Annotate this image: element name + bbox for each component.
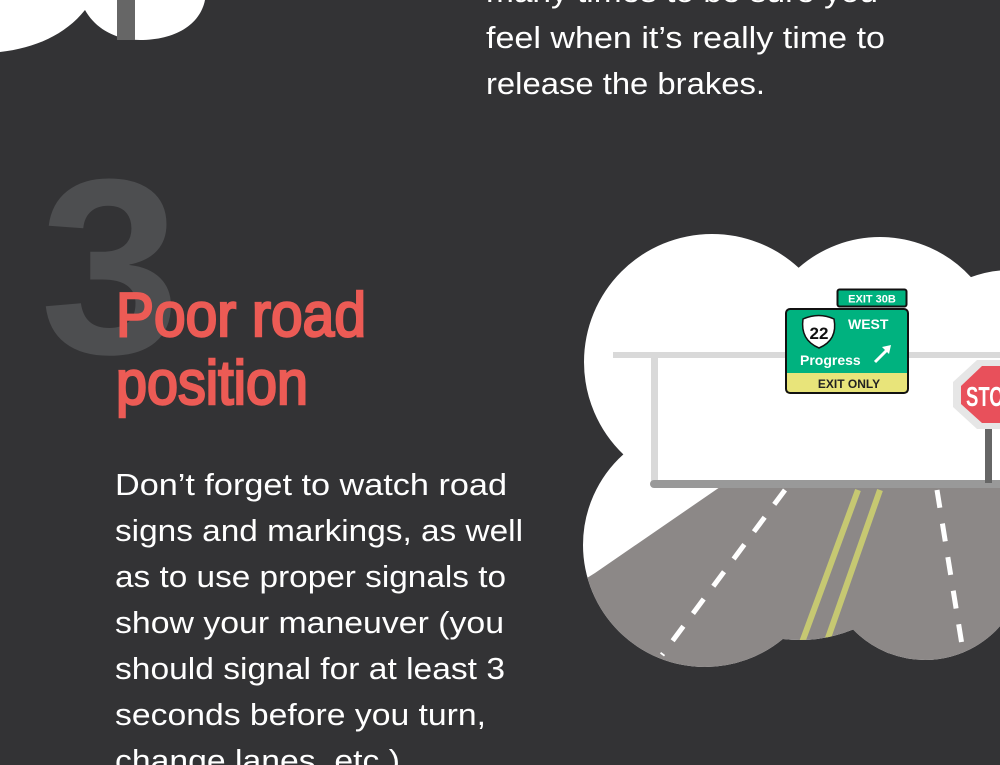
highway sign: Progress [800,352,861,368]
heading: Poor road [116,281,366,350]
text block: top right [486,0,885,101]
heading: position [116,349,308,418]
body text: Don’t forget to watch road [115,467,507,502]
highway sign: 22 [810,324,828,343]
body text: as to use proper signals to [115,559,506,594]
body text: show your maneuver (you [115,605,504,640]
body text: seconds before you turn, [115,697,486,732]
heading [116,281,366,418]
highway sign: WEST [848,316,889,332]
big number 3: 3 [40,127,180,406]
illustration: road scene cloud [583,234,1000,667]
body text: should signal for at least 3 [115,651,505,686]
gantry [613,352,1000,358]
road [588,488,1000,667]
highway sign [786,290,908,393]
cloud: top-left fragment [0,0,205,52]
body text [115,467,523,765]
body text: signs and markings, as well [115,513,523,548]
text block: top right: release the brakes. [486,66,765,101]
text block: top right: feel when it’s really time to [486,20,885,55]
highway sign: EXIT 30B [848,294,896,306]
highway sign: EXIT ONLY [818,377,880,391]
stop sign [953,360,1000,483]
